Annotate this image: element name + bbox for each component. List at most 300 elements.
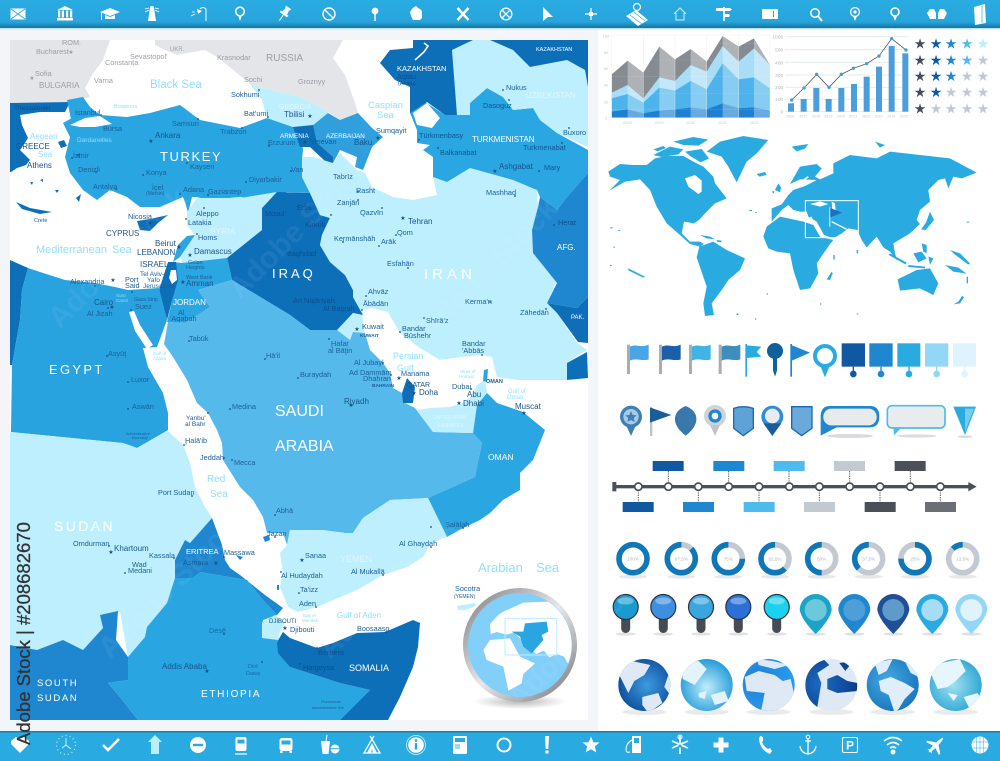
stem pin 4 xyxy=(726,594,751,636)
icon: document xyxy=(974,4,986,25)
labels: cities: Rasht xyxy=(356,186,375,195)
icon: parking: P xyxy=(846,738,854,752)
labels: countries: ISRAEL xyxy=(140,260,169,269)
dark pin xyxy=(767,343,783,377)
icon: graduation cap xyxy=(100,8,120,20)
labels: cities: Qom xyxy=(397,228,413,237)
labels: countries: TURKMENISTAN xyxy=(472,135,535,144)
labels: seas: Bosporus xyxy=(114,104,137,110)
star row 1 xyxy=(914,36,989,52)
area chart axis labels: 100 xyxy=(603,33,610,38)
year labels: 2025 xyxy=(900,114,908,118)
icon: hands xyxy=(927,9,947,19)
labels: cities: Bat'umi xyxy=(244,109,268,118)
icon: bank xyxy=(57,6,73,20)
star row 3: ★ xyxy=(977,68,989,84)
labels: cities: Konya xyxy=(146,168,168,177)
glossy flag 4 xyxy=(719,345,740,374)
labels: cities: Said xyxy=(125,281,140,290)
star row 5: ★ xyxy=(930,100,942,116)
year labels: 2022 xyxy=(862,114,870,118)
labels: cities: Port xyxy=(125,275,138,284)
labels: seas: Aqaba xyxy=(153,356,167,361)
labels: cities: Sanaa xyxy=(305,551,327,560)
donut 37.5%: 37,5% xyxy=(862,557,875,562)
labels: cities: West Bank xyxy=(186,275,213,281)
icon: heart tag xyxy=(11,737,29,753)
globe 1 xyxy=(618,659,670,715)
labels: cities: Diyarbakir xyxy=(249,175,282,184)
inlet: Kazakhstan coast xyxy=(415,43,428,60)
sea of Marmara xyxy=(70,116,112,127)
bar chart axis: 400 xyxy=(775,60,784,66)
labels: cities: Jazan xyxy=(267,529,286,538)
labels: cities: Yerevan xyxy=(310,137,337,146)
labels: cities: Herat xyxy=(558,218,576,227)
icon: plus xyxy=(714,738,728,752)
labels: countries: SUDAN xyxy=(37,693,78,704)
labels: countries xyxy=(16,47,585,704)
country: Oman xyxy=(428,393,545,537)
labels: cities: Istanbul xyxy=(75,108,101,117)
icon: crosshair xyxy=(585,8,597,20)
bar chart axis: 500 xyxy=(775,48,784,54)
star row 1: ★ xyxy=(930,36,942,52)
labels: cities: al Bahr xyxy=(185,421,206,428)
country: Yemen xyxy=(280,498,447,612)
swatch callout 1 xyxy=(842,343,865,377)
labels: cities: Zāhedān xyxy=(520,308,549,317)
labels: cities: Adana xyxy=(183,185,205,194)
teardrop 3 xyxy=(877,594,909,636)
North America xyxy=(608,156,727,247)
labels: cities: Riyadh xyxy=(344,397,369,406)
star row 3: ★ xyxy=(914,68,926,84)
labels: cities: al Bāţin xyxy=(328,346,352,355)
labels: seas: Caspian xyxy=(368,100,403,111)
labels: countries: PAK. xyxy=(571,315,585,321)
labels: cities: Al Ghaydah xyxy=(399,539,437,548)
labels: grey neighbours xyxy=(35,38,326,90)
top icon bar xyxy=(0,0,1000,30)
labels: countries: KUWAIT xyxy=(360,333,379,339)
donut 50% xyxy=(808,545,836,579)
labels: countries: KAZAKHSTAN xyxy=(397,64,446,73)
labels: countries: DJIBOUTI xyxy=(269,619,297,625)
labels: cities: Baku xyxy=(354,138,372,147)
teardrop 2 xyxy=(838,594,870,636)
labels: cities: Medani xyxy=(128,566,152,575)
year labels: 2018 xyxy=(812,114,820,118)
icon: info xyxy=(406,736,426,754)
country: Lebanon and west Jordan strip xyxy=(173,235,195,262)
labels: cities: Gaziantep xyxy=(208,187,241,196)
ring marker xyxy=(815,346,835,377)
globe ocean xyxy=(468,593,572,697)
labels: seas: Sea xyxy=(38,150,53,159)
icon: tent xyxy=(364,736,380,753)
labels: cities: Yafo xyxy=(147,277,160,284)
labels: cities: Trabzon xyxy=(220,127,246,136)
glossy flag 2 xyxy=(659,345,681,374)
labels: cities: Tabrīz xyxy=(333,172,353,181)
labels: grey neighbours: RUSSIA xyxy=(266,53,304,64)
pole flag xyxy=(650,407,671,436)
globe 5 xyxy=(867,659,919,715)
icon: building xyxy=(148,735,162,754)
area chart grid xyxy=(612,43,770,109)
icon: train xyxy=(235,737,247,754)
area chart axis labels: 2021 xyxy=(718,120,728,125)
labels: cities: Mosul xyxy=(265,209,285,218)
bar and line chart xyxy=(772,35,908,118)
icon: lighthouse xyxy=(145,6,159,21)
labels: cities: Bandar xyxy=(402,324,426,333)
star row 1: ★ xyxy=(914,36,926,52)
labels: cities: Provisional xyxy=(321,699,341,704)
labels: cities: Esfahān xyxy=(387,259,414,268)
labels: countries: (YEMEN) xyxy=(454,594,475,600)
labels: cities: Ḩafar xyxy=(331,339,349,348)
capital stars: ★ xyxy=(299,557,305,564)
New Zealand xyxy=(953,296,964,304)
Africa xyxy=(763,217,833,290)
capital stars: ★ xyxy=(213,560,219,567)
donut 62.5%: 62,5% xyxy=(768,557,782,562)
labels: cities: Turkmenabat xyxy=(523,143,566,152)
icon: hand xyxy=(410,6,422,20)
capital stars: ★ xyxy=(456,400,462,407)
donut 25%: 25% xyxy=(910,557,920,562)
lighter alternate bands xyxy=(628,33,770,118)
Madagascar xyxy=(827,272,833,280)
labels: cities: Shīrā'z xyxy=(426,316,449,325)
teardrop 5 xyxy=(955,594,987,636)
icon: shower xyxy=(191,8,206,21)
faint watermark: Adobe Stock xyxy=(92,512,245,665)
labels: cities: Asyūţ xyxy=(108,349,126,358)
teardrop 1 xyxy=(800,594,832,636)
labels: cities: Sokhumi xyxy=(231,90,260,99)
labels: cities: Tbilisi xyxy=(284,110,305,119)
labels: cities: Ta'izz xyxy=(300,585,318,594)
star row 5 xyxy=(914,100,989,116)
donut 12.5% xyxy=(943,539,982,579)
labels: cities: Yanbu' xyxy=(186,415,206,422)
capital stars: ★ xyxy=(204,668,210,675)
Eurasia xyxy=(772,152,977,261)
star row 2: ★ xyxy=(945,52,957,68)
labels: cities: Suez xyxy=(135,302,152,311)
labels: seas: Gulf of Aden xyxy=(337,611,381,620)
labels: cities: Wad xyxy=(132,560,147,569)
labels: cities: Ābādān xyxy=(363,299,388,308)
globe highlighted region xyxy=(512,622,548,653)
Hudson Bay xyxy=(685,175,702,194)
teardrop 4 xyxy=(916,594,948,636)
labels: cities: Boosaaso xyxy=(357,624,389,633)
labels: seas: Gulf of xyxy=(508,389,526,395)
icon: wifi xyxy=(884,738,902,754)
island: Crete xyxy=(16,202,52,214)
labels: cities: Tehran xyxy=(408,217,432,226)
donut 12.5%: 12,5% xyxy=(956,557,969,562)
area chart axis labels: 2022 xyxy=(750,120,759,125)
capital stars: ★ xyxy=(354,326,360,333)
land: Balkans grey xyxy=(10,40,110,103)
pennant flag xyxy=(745,344,761,377)
labels: cities: Kermānshāh xyxy=(334,234,375,243)
area chart frame lines xyxy=(612,35,770,118)
labels: cities: Kayseri xyxy=(190,162,215,171)
globe 2 xyxy=(681,659,733,715)
labels: countries: EMIRATES xyxy=(438,423,464,429)
Greenland xyxy=(707,136,768,182)
year labels: 2021 xyxy=(849,114,857,118)
West Bank xyxy=(169,270,177,284)
star row 3: ★ xyxy=(945,68,957,84)
icon: map with pin xyxy=(626,4,648,26)
labels: cities: Antalya xyxy=(93,182,118,191)
country: Egypt xyxy=(11,268,168,448)
capital stars: ★ xyxy=(68,49,74,56)
country: Azerbaijan xyxy=(312,113,383,170)
labels: grey neighbours: BULGARIA xyxy=(39,81,80,90)
icon: parking xyxy=(842,738,858,752)
faint watermark: Adobe Stock xyxy=(42,182,195,335)
icon: prohibited xyxy=(323,8,335,20)
capital stars: ★ xyxy=(307,113,313,120)
swatch callout 5 xyxy=(953,343,976,377)
labels: cities: Beirut xyxy=(155,239,177,248)
capital stars: ★ xyxy=(109,304,115,311)
icon: wrenches xyxy=(672,735,688,754)
star row 2: ★ xyxy=(961,52,973,68)
star row 3 xyxy=(914,68,989,84)
star row 5: ★ xyxy=(977,100,989,116)
labels: cities: Dubai xyxy=(452,382,471,391)
swatch callout 2 xyxy=(869,343,893,377)
capital stars: ★ xyxy=(521,410,527,417)
labels: grey neighbours: Sochi xyxy=(244,75,263,84)
Cuba and Caribbean xyxy=(700,235,722,242)
labels: cities: Tabūk xyxy=(189,334,209,343)
small dots xyxy=(610,210,970,320)
labels: countries: SYRIA xyxy=(210,226,236,236)
labels: cities: Khartoum xyxy=(114,544,149,553)
stem pin 3 xyxy=(688,594,714,636)
Garabogaz bay xyxy=(413,103,440,128)
star row 2: ★ xyxy=(914,52,926,68)
Aegean islands xyxy=(30,140,81,202)
country: UAE xyxy=(417,380,487,433)
star row 5: ★ xyxy=(945,100,957,116)
labels: cities: Dasoguz xyxy=(483,101,512,110)
country: Turkey xyxy=(63,97,310,213)
labels: cities: Ashgabat xyxy=(499,162,534,171)
Black and Caspian Seas xyxy=(810,201,836,215)
labels: cities: Erzurum xyxy=(268,138,296,147)
labels: seas: Aegean xyxy=(30,132,58,141)
swatch callout 3 xyxy=(897,343,920,377)
Iceland and UK xyxy=(757,142,885,194)
area chart axis labels: 20 xyxy=(604,99,609,104)
country: Jordan xyxy=(167,258,232,323)
country: Kazakhstan west xyxy=(380,40,473,115)
donut 100% xyxy=(619,545,647,579)
donut 100%: 100% xyxy=(627,557,639,562)
labels: countries: SUDAN xyxy=(54,518,115,534)
star row 5: ★ xyxy=(961,100,973,116)
globe 6 xyxy=(930,659,982,715)
labels: cities: Al Jizah xyxy=(87,309,113,318)
labels: countries: SAUDI xyxy=(275,403,324,420)
star row 4: ★ xyxy=(914,84,926,100)
labels: countries: UZBEKISTAN xyxy=(526,91,576,100)
globe 4 xyxy=(805,659,857,715)
capital stars: ★ xyxy=(147,220,153,227)
labels: cities: Dhabi xyxy=(463,399,484,408)
glossy flag 1 xyxy=(627,345,649,374)
country: Libya xyxy=(10,260,28,365)
stem pin 2 xyxy=(651,594,676,636)
labels: countries: GEORGIA xyxy=(279,104,312,111)
labels: grey neighbours: Groznyy xyxy=(298,77,326,86)
inset globe xyxy=(463,588,577,709)
labels: cities: Al xyxy=(178,308,185,317)
capital stars: ★ xyxy=(348,402,354,409)
island: Cyprus xyxy=(137,215,168,231)
star row 3: ★ xyxy=(961,68,973,84)
labels: seas: Red xyxy=(207,474,225,485)
labels: cities: Samsun xyxy=(172,119,199,128)
labels: cities: Desē xyxy=(209,626,226,635)
labels: countries: KAZAKHSTAN xyxy=(536,47,572,53)
labels: cities: Şalālah xyxy=(445,520,469,529)
Red Sea and Persian Gulf xyxy=(811,217,847,233)
icon: globe xyxy=(972,736,988,754)
labels: cities xyxy=(14,72,586,710)
labels: seas: Dardanelles xyxy=(77,137,112,144)
star row 4: ★ xyxy=(945,84,957,100)
Australia xyxy=(898,268,938,295)
city markers xyxy=(71,89,570,665)
island: Socotra xyxy=(457,603,476,610)
area chart axis labels: 2018 xyxy=(623,120,633,125)
labels: cities: Massawa xyxy=(224,548,256,557)
labels: cities: Abu xyxy=(467,390,481,399)
bar chart axis: 300 xyxy=(775,73,784,79)
labels: cities: Kerma'n xyxy=(465,297,492,306)
bar chart axis: 200 xyxy=(775,85,784,91)
labels: cities: Dhahran xyxy=(363,374,391,383)
labels: cities: Kirkuk xyxy=(305,220,326,229)
labels: cities: Ad Dammām xyxy=(349,368,392,377)
icon: no entry xyxy=(190,737,206,753)
area chart axis labels: 2020 xyxy=(686,120,696,125)
labels: grey neighbours: Varna xyxy=(94,76,114,85)
country: Sudan xyxy=(10,431,212,657)
trend line xyxy=(792,39,906,100)
shield 1 xyxy=(734,407,753,436)
capital stars: ★ xyxy=(400,215,406,222)
labels: seas: Arabian xyxy=(478,560,523,575)
icon: drink and burger xyxy=(321,735,340,754)
markers row 2 xyxy=(620,405,976,438)
glossy flag 3 xyxy=(689,345,711,374)
land: Russia and Ukraine grey xyxy=(155,40,358,120)
capital stars: ★ xyxy=(492,168,498,175)
globe ring xyxy=(463,588,577,702)
labels: cities: Baghdad xyxy=(287,249,316,258)
star row 4: ★ xyxy=(961,84,973,100)
labels: seas: Gulf xyxy=(397,363,414,373)
country: Somalia xyxy=(277,620,420,720)
country: Djibouti xyxy=(262,615,285,640)
world map xyxy=(608,136,977,320)
icon: ring xyxy=(498,738,510,752)
faint watermark: Adobe Stock xyxy=(312,512,465,665)
capital stars: ★ xyxy=(180,279,186,286)
labels: countries: ETHIOPIA xyxy=(201,689,261,700)
labels: cities: Alexandria xyxy=(70,277,105,286)
star row 4 xyxy=(914,84,989,100)
country: Turkmenistan xyxy=(410,88,588,210)
labels: cities: Bandar xyxy=(462,339,486,348)
swatch callout 4 xyxy=(925,343,948,377)
labels: countries: IRAQ xyxy=(272,266,316,281)
capital stars: ★ xyxy=(176,244,182,251)
area chart axis labels: 80 xyxy=(604,50,609,55)
faint watermark: Adobe Stock xyxy=(222,152,375,305)
labels: cities: Arāk xyxy=(381,237,396,246)
donut 87.5% xyxy=(662,539,701,579)
icon: signpost xyxy=(716,7,732,21)
star pin xyxy=(620,406,642,436)
labels: cities: Administrative xyxy=(126,432,150,436)
area chart axis labels: 2019 xyxy=(655,120,665,125)
labels: countries: EGYPT xyxy=(49,362,105,377)
country: Pakistan south xyxy=(567,352,588,380)
bar chart axis: 0 xyxy=(781,110,784,116)
labels: cities: Crete xyxy=(34,218,47,224)
donut 87.5%: 87,5% xyxy=(675,557,688,562)
labels: cities: Türkmenbasy xyxy=(419,131,464,140)
bars xyxy=(788,46,908,112)
donut 50%: 50% xyxy=(817,557,826,562)
labels: cities: Dawa xyxy=(246,671,261,677)
labels: seas xyxy=(30,79,560,623)
icon: check xyxy=(103,739,119,750)
labels: cities: Mecca xyxy=(234,458,256,467)
star row 2: ★ xyxy=(930,52,942,68)
labels: grey neighbours: UKR. xyxy=(170,47,185,53)
labels: cities: Mashhad xyxy=(486,188,516,197)
labels: cities: Mary xyxy=(544,163,561,172)
year labels xyxy=(786,114,908,118)
capital stars: ★ xyxy=(108,549,114,556)
labels: seas: Strait of xyxy=(460,369,476,374)
teardrop pins xyxy=(800,594,987,636)
dark stem pins xyxy=(613,594,789,636)
speech bubble light xyxy=(887,406,945,438)
icon: phone xyxy=(759,736,772,754)
labels: cities: Denizli xyxy=(78,165,100,174)
country: Kuwait xyxy=(337,313,365,340)
labels: cities: Van xyxy=(291,165,303,174)
left panel backdrop xyxy=(0,28,598,732)
labels: cities: Addis Ababa xyxy=(162,662,207,671)
